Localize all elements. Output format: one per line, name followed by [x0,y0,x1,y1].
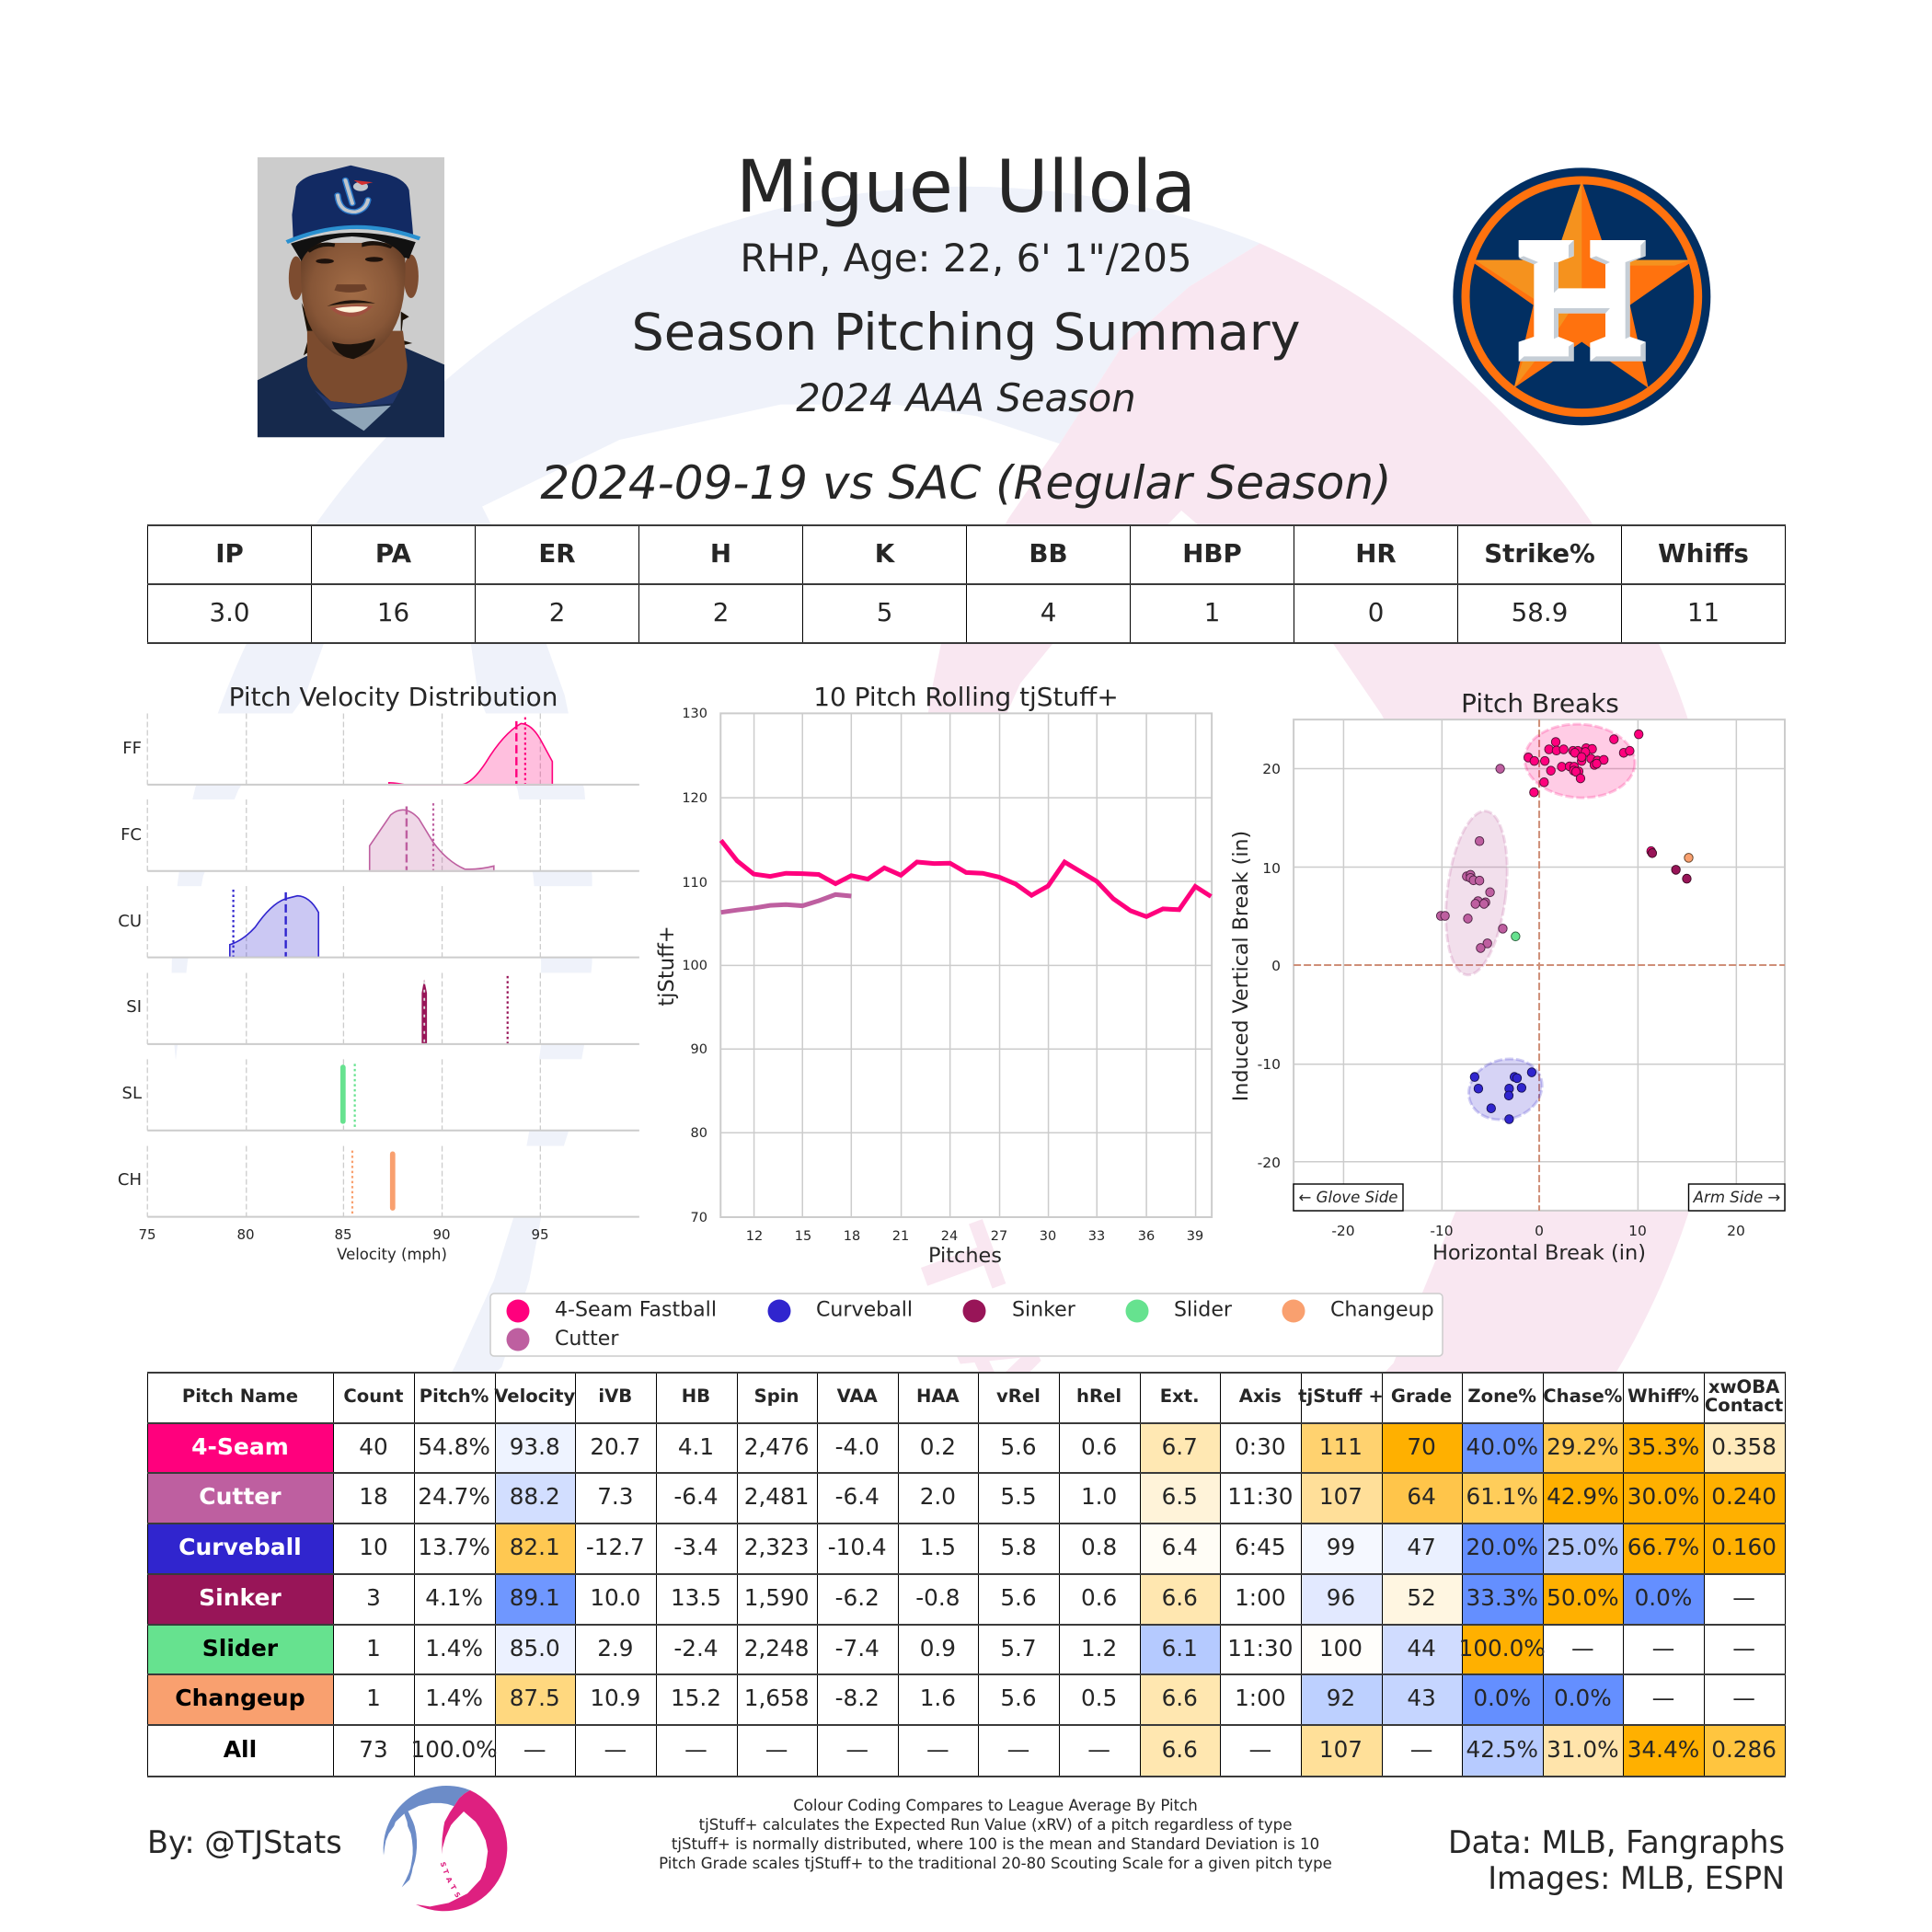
table: pitch metrics: HB [682,1386,710,1407]
table: pitch metrics: 0:30 [1235,1433,1286,1459]
table: pitch metrics: vRel [996,1386,1041,1407]
table: pitch metrics: 5.8 [1000,1534,1037,1560]
table: pitch metrics: 6.7 [1162,1433,1198,1459]
table: pitch metrics: Pitch Name [182,1386,298,1407]
table: pitch metrics: 34.4% [1627,1735,1699,1763]
table: pitch metrics: 73 [359,1735,388,1763]
footer: data sources: Images: MLB, ESPN [1488,1860,1785,1896]
table: pitch metrics: 42.5% [1466,1735,1538,1763]
table: pitch metrics: 52 [1407,1584,1436,1611]
callout: glove side: ← Glove Side [1299,1189,1398,1206]
stat table: game line [147,524,1786,644]
legend: pitch types: Slider [1174,1297,1233,1321]
legend: pitch types: Changeup [1330,1297,1434,1321]
table: pitch metrics: 0.8 [1081,1534,1117,1560]
table: pitch metrics: — [1410,1735,1432,1763]
stat table: game line: IP [215,538,244,569]
table: pitch metrics: Sinker [199,1584,282,1611]
table: pitch metrics: 7.3 [597,1483,633,1510]
table: pitch metrics: 6.6 [1162,1735,1198,1763]
table: pitch metrics: Pitch% [420,1386,489,1407]
background: faint TJStats baseball logo watermark: S [1041,1496,1179,1624]
legend: pitch types: Sinker [1012,1297,1076,1321]
y axis ticks: tjStuff+: 120 [682,791,707,806]
x axis ticks: pitches: 30 [1040,1229,1056,1244]
table: pitch metrics: 54.8% [418,1433,490,1459]
table: pitch metrics: xwOBA [1708,1376,1779,1397]
stat table: game line: 5 [877,597,892,627]
table: pitch metrics: 40.0% [1466,1433,1538,1459]
table: pitch metrics: Chase% [1543,1386,1622,1407]
table: pitch metrics: Axis [1239,1386,1282,1407]
table: pitch metrics: -3.4 [673,1534,719,1560]
table: pitch metrics: — [1732,1685,1755,1711]
chart heading: rolling: 10 Pitch Rolling tjStuff+ [813,682,1119,712]
icon: TJStats logo: S [439,1861,448,1868]
background: faint TJStats baseball logo watermark: T [983,1402,1120,1522]
y axis label: induced vertical break: Induced Vertical Break (in) [1229,831,1253,1101]
table: pitch metrics: 0.358 [1711,1433,1777,1459]
table: pitch metrics: 4-Seam [191,1433,289,1459]
x axis ticks: velocity [138,1226,549,1243]
table: pitch metrics: Zone% [1467,1386,1536,1407]
table: pitch metrics: 4.1% [425,1584,483,1611]
table: pitch metrics: 66.7% [1627,1534,1699,1560]
stat table: game line: HBP [1182,538,1242,569]
subtitle: bio: RHP, Age: 22, 6' 1"/205 [740,236,1192,281]
x axis label: velocity: Velocity (mph) [337,1246,447,1263]
table: pitch metrics: Count [343,1386,403,1407]
stat table: game line: 11 [1687,597,1719,627]
table: pitch metrics: 2,248 [744,1634,809,1662]
table: pitch metrics: 82.1 [510,1534,560,1560]
heading: season: 2024 AAA Season [796,375,1136,420]
table: pitch metrics: -6.4 [673,1483,719,1510]
table: pitch metrics: 15.2 [671,1685,721,1711]
table: pitch metrics: 1.2 [1081,1634,1117,1662]
table: pitch metrics: 100.0% [1459,1634,1546,1662]
title: player name: Miguel Ullola [736,146,1196,229]
x axis ticks: horizontal break [1331,1223,1745,1239]
table: pitch metrics: 43 [1407,1685,1436,1711]
stat table: game line: 2 [713,597,729,627]
y axis ticks: tjStuff+: 90 [691,1042,707,1057]
table: pitch metrics: -8.2 [835,1685,880,1711]
footer: methodology notes: Pitch Grade scales tjStuff+ to the traditional 20-80 Scouting Scale for a given pitch type [659,1855,1332,1872]
y axis ticks: tjStuff+: 100 [682,959,707,973]
x axis ticks: velocity: 75 [138,1226,156,1243]
table: pitch metrics: 93.8 [510,1433,560,1459]
table: pitch metrics: -6.4 [835,1483,880,1510]
x axis ticks: pitches: 18 [844,1229,860,1244]
table: pitch metrics: 13.5 [671,1584,721,1611]
table: pitch metrics: Whiff% [1627,1386,1699,1407]
row labels: pitch codes: SI [126,997,142,1017]
table: pitch metrics: -4.0 [835,1433,880,1459]
x axis ticks: pitches: 27 [991,1229,1007,1244]
table: pitch metrics: 13.7% [418,1534,490,1560]
table: pitch metrics: — [523,1735,546,1763]
stat table: game line: 3.0 [209,597,250,627]
table: pitch metrics: Velocity [494,1386,575,1407]
callout: arm side: Arm Side → [1693,1189,1780,1206]
table: pitch metrics: 18 [359,1483,388,1510]
table: pitch metrics: 1:00 [1235,1584,1286,1611]
table: pitch metrics: 20.0% [1466,1534,1538,1560]
table: pitch metrics: HAA [916,1386,960,1407]
table: pitch metrics: 0.286 [1711,1735,1777,1763]
y axis ticks: induced break [1258,761,1281,1171]
table: pitch metrics: iVB [598,1386,632,1407]
table: pitch metrics: — [1652,1634,1674,1662]
table: pitch metrics: 33.3% [1466,1584,1538,1611]
table: pitch metrics: 1.0 [1081,1483,1117,1510]
table: pitch metrics: 2,481 [744,1483,809,1510]
x axis ticks: horizontal break: 10 [1628,1223,1647,1239]
x axis label: pitches: Pitches [928,1244,1002,1268]
row labels: pitch codes: CH [118,1170,142,1190]
table: pitch metrics: 89.1 [510,1584,560,1611]
row labels: pitch codes: CU [118,912,142,931]
table: pitch metrics: 40 [359,1433,388,1459]
table: pitch metrics: hRel [1076,1386,1121,1407]
table: pitch metrics: 0.0% [1473,1685,1531,1711]
y axis ticks: induced break: 20 [1262,761,1281,777]
table: pitch metrics: 1,658 [744,1685,809,1711]
table: pitch metrics: 44 [1407,1634,1436,1662]
table: pitch metrics: 1.5 [920,1534,956,1560]
table: pitch metrics: — [1248,1735,1271,1763]
table: pitch metrics: Spin [754,1386,799,1407]
x axis ticks: pitches [746,1229,1203,1244]
table: pitch metrics: 5.5 [1000,1483,1037,1510]
icon: TJStats logo: T [441,1868,451,1876]
x axis ticks: velocity: 80 [236,1226,255,1243]
legend: pitch types: Cutter [555,1327,619,1351]
callout: glove side [1294,1184,1403,1211]
legend: pitch types: 4-Seam Fastball [555,1297,717,1321]
table: pitch metrics: — [845,1735,868,1763]
row labels: pitch codes: SL [122,1084,142,1103]
table: pitch metrics: tjStuff + [1298,1386,1384,1407]
table: pitch metrics: -12.7 [586,1534,645,1560]
y axis ticks: induced break: -10 [1258,1056,1281,1073]
stat table: game line: Whiffs [1658,538,1749,569]
table: pitch metrics: 61.1% [1466,1483,1538,1510]
table: pitch metrics: 5.6 [1000,1584,1037,1611]
table: pitch metrics: 2.0 [920,1483,956,1510]
stat table: game line: 0 [1368,597,1384,627]
table: pitch metrics: 2,476 [744,1433,809,1459]
footer: author credit: By: @TJStats [147,1824,342,1860]
table: pitch metrics: 1:00 [1235,1685,1286,1711]
table: pitch metrics: All [224,1735,257,1763]
table: pitch metrics: 1 [366,1685,381,1711]
x axis ticks: velocity: 90 [432,1226,451,1243]
table: pitch metrics: 42.9% [1547,1483,1619,1510]
stat table: game line: 58.9 [1512,597,1568,627]
chart: rolling line plot [720,713,1212,1217]
table: pitch metrics: 24.7% [418,1483,490,1510]
y axis label: tjStuff+: tjStuff+ [655,926,679,1006]
table: pitch metrics: 3 [366,1584,381,1611]
stat table: game line: 4 [1041,597,1056,627]
table: pitch metrics: 30.0% [1627,1483,1699,1510]
y axis ticks: tjStuff+: 70 [691,1211,707,1225]
y axis ticks: induced break: 0 [1271,958,1281,974]
table: pitch metrics [147,1372,1786,1777]
footer: data sources: Data: MLB, Fangraphs [1448,1824,1785,1860]
table: pitch metrics: 0.6 [1081,1584,1117,1611]
table: pitch metrics: 96 [1327,1584,1355,1611]
table: pitch metrics: 6:45 [1235,1534,1286,1560]
footer: methodology notes: tjStuff+ is normally distributed, where 100 is the mean and Standard Deviation is 10 [672,1835,1319,1853]
table: pitch metrics: 29.2% [1547,1433,1619,1459]
row labels: pitch codes: FC [121,825,142,845]
table: pitch metrics: 35.3% [1627,1433,1699,1459]
stat table: game line: H [710,538,731,569]
table: pitch metrics: 1.4% [425,1685,483,1711]
table: pitch metrics: 64 [1407,1483,1436,1510]
table: pitch metrics: Slider [202,1634,278,1662]
table: pitch metrics: 4.1 [678,1433,714,1459]
chart heading: velocity: Pitch Velocity Distribution [229,682,558,712]
table: pitch metrics: 11:30 [1227,1483,1293,1510]
table: pitch metrics: 47 [1407,1534,1436,1560]
stat table: game line: ER [538,538,576,569]
table: pitch metrics: 0.2 [920,1433,956,1459]
table: pitch metrics: -2.4 [673,1634,719,1662]
x axis ticks: pitches: 39 [1187,1229,1203,1244]
table: pitch metrics: — [1652,1685,1674,1711]
table: pitch metrics: 11:30 [1227,1634,1293,1662]
y axis ticks: tjStuff+: 80 [691,1126,707,1141]
table: pitch metrics: — [1732,1584,1755,1611]
table: pitch metrics: — [926,1735,949,1763]
table: pitch metrics: 87.5 [510,1685,560,1711]
table: pitch metrics: 100.0% [410,1735,498,1763]
table: pitch metrics: 10.9 [590,1685,640,1711]
footer: methodology notes: Colour Coding Compares to League Average By Pitch [793,1797,1198,1814]
table: pitch metrics: 6.5 [1162,1483,1198,1510]
table: pitch metrics: 1,590 [744,1584,809,1611]
table: pitch metrics: 92 [1327,1685,1355,1711]
stat table: game line: K [875,538,894,569]
table: pitch metrics: 10 [359,1534,388,1560]
icon: TJStats logo: T [448,1883,458,1892]
chart heading: breaks: Pitch Breaks [1461,688,1619,719]
footer: methodology notes: tjStuff+ calculates the Expected Run Value (xRV) of a pitch regardless of type [699,1816,1292,1834]
table: pitch metrics: 0.0% [1554,1685,1612,1711]
table: pitch metrics: — [1571,1634,1594,1662]
table: pitch metrics: — [684,1735,707,1763]
table: pitch metrics: -6.2 [835,1584,880,1611]
table: pitch metrics: 1.4% [425,1634,483,1662]
table: pitch metrics: 31.0% [1547,1735,1619,1763]
chart: velocity density rows [147,713,639,1217]
table: pitch metrics: 85.0 [510,1634,560,1662]
stat table: game line: BB [1029,538,1068,569]
legend: pitch types: Curveball [816,1297,913,1321]
x axis ticks: pitches: 15 [795,1229,811,1244]
table: pitch metrics: VAA [837,1386,878,1407]
table: pitch metrics: Ext. [1160,1386,1200,1407]
table: pitch metrics: -7.4 [835,1634,880,1662]
stat table: game line: 16 [377,597,409,627]
x axis ticks: horizontal break: -20 [1331,1223,1355,1239]
table: pitch metrics: Changeup [175,1685,305,1711]
y axis ticks: tjStuff+: 130 [682,707,707,721]
x axis ticks: horizontal break: 20 [1727,1223,1745,1239]
table: pitch metrics: 0.5 [1081,1685,1117,1711]
table: pitch metrics: Grade [1391,1386,1452,1407]
background: faint TJStats baseball logo watermark: T [889,1212,1025,1318]
chart: movement scatter [1294,719,1785,1211]
table: pitch metrics: 107 [1319,1735,1363,1763]
y axis ticks: induced break: -20 [1258,1155,1281,1171]
table: pitch metrics: — [1007,1735,1029,1763]
table: pitch metrics: 99 [1327,1534,1355,1560]
icon: TJStats logo: A [444,1876,454,1884]
table: pitch metrics: Contact [1705,1395,1783,1416]
x axis ticks: pitches: 33 [1088,1229,1105,1244]
table: pitch metrics: 0.0% [1635,1584,1692,1611]
table: pitch metrics: 6.6 [1162,1584,1198,1611]
background: faint TJStats baseball logo watermark: S [858,1123,992,1225]
table: pitch metrics: 0.240 [1711,1483,1777,1510]
table: pitch metrics: — [765,1735,788,1763]
stat table: game line: HR [1355,538,1397,569]
x axis ticks: horizontal break: -10 [1430,1223,1454,1239]
table: pitch metrics: 10.0 [590,1584,640,1611]
table: pitch metrics: Cutter [199,1483,282,1510]
x axis label: horizontal break: Horizontal Break (in) [1432,1241,1646,1265]
stat table: game line: Strike% [1484,538,1595,569]
table: pitch metrics: 6.6 [1162,1685,1198,1711]
table: pitch metrics: -0.8 [915,1584,960,1611]
x axis ticks: velocity: 95 [531,1226,549,1243]
x axis ticks: pitches: 24 [941,1229,958,1244]
icon: TJStats logo: S [453,1891,462,1899]
table: pitch metrics: 5.7 [1000,1634,1037,1662]
stat table: game line: 2 [549,597,565,627]
x axis ticks: velocity: 85 [334,1226,352,1243]
x axis ticks: pitches: 36 [1138,1229,1155,1244]
table: pitch metrics: 50.0% [1547,1584,1619,1611]
stat table: game line: PA [375,538,411,569]
table: pitch metrics: 111 [1319,1433,1363,1459]
x axis ticks: pitches: 21 [892,1229,909,1244]
table: pitch metrics: 6.4 [1162,1534,1198,1560]
table: pitch metrics: 5.6 [1000,1685,1037,1711]
table: pitch metrics: 1 [366,1634,381,1662]
y axis ticks: tjStuff+ [682,707,707,1225]
row labels: pitch codes: FF [122,739,142,758]
table: pitch metrics: — [1087,1735,1110,1763]
table: pitch metrics: 6.1 [1162,1634,1198,1662]
table: pitch metrics: 0.6 [1081,1433,1117,1459]
table: pitch metrics: 107 [1319,1483,1363,1510]
heading: Season Pitching Summary: Season Pitching Summary [631,303,1301,362]
x axis ticks: pitches: 12 [746,1229,763,1244]
table: pitch metrics: 2,323 [744,1534,809,1560]
table: pitch metrics: 2.9 [597,1634,633,1662]
table: pitch metrics: 88.2 [510,1483,560,1510]
table: pitch metrics: 25.0% [1547,1534,1619,1560]
table: pitch metrics: 70 [1407,1433,1436,1459]
table: pitch metrics: -10.4 [828,1534,887,1560]
row labels: pitch codes [118,739,142,1190]
stat table: game line: 1 [1204,597,1220,627]
table: pitch metrics: 0.160 [1711,1534,1777,1560]
table: pitch metrics: 5.6 [1000,1433,1037,1459]
table: pitch metrics: — [1732,1634,1755,1662]
y axis ticks: induced break: 10 [1262,860,1281,877]
x axis ticks: horizontal break: 0 [1535,1223,1544,1239]
background: faint TJStats baseball logo watermark: A [929,1306,1071,1428]
table: pitch metrics: 1.6 [920,1685,956,1711]
y axis ticks: tjStuff+: 110 [682,876,707,891]
table: pitch metrics: 0.9 [920,1634,956,1662]
callout: arm side [1689,1184,1785,1211]
table: pitch metrics: Curveball [178,1534,302,1560]
table: pitch metrics: 100 [1319,1634,1363,1662]
heading: game date: 2024-09-19 vs SAC (Regular Season) [540,456,1392,510]
table: pitch metrics: — [604,1735,627,1763]
table: pitch metrics: 20.7 [590,1433,640,1459]
